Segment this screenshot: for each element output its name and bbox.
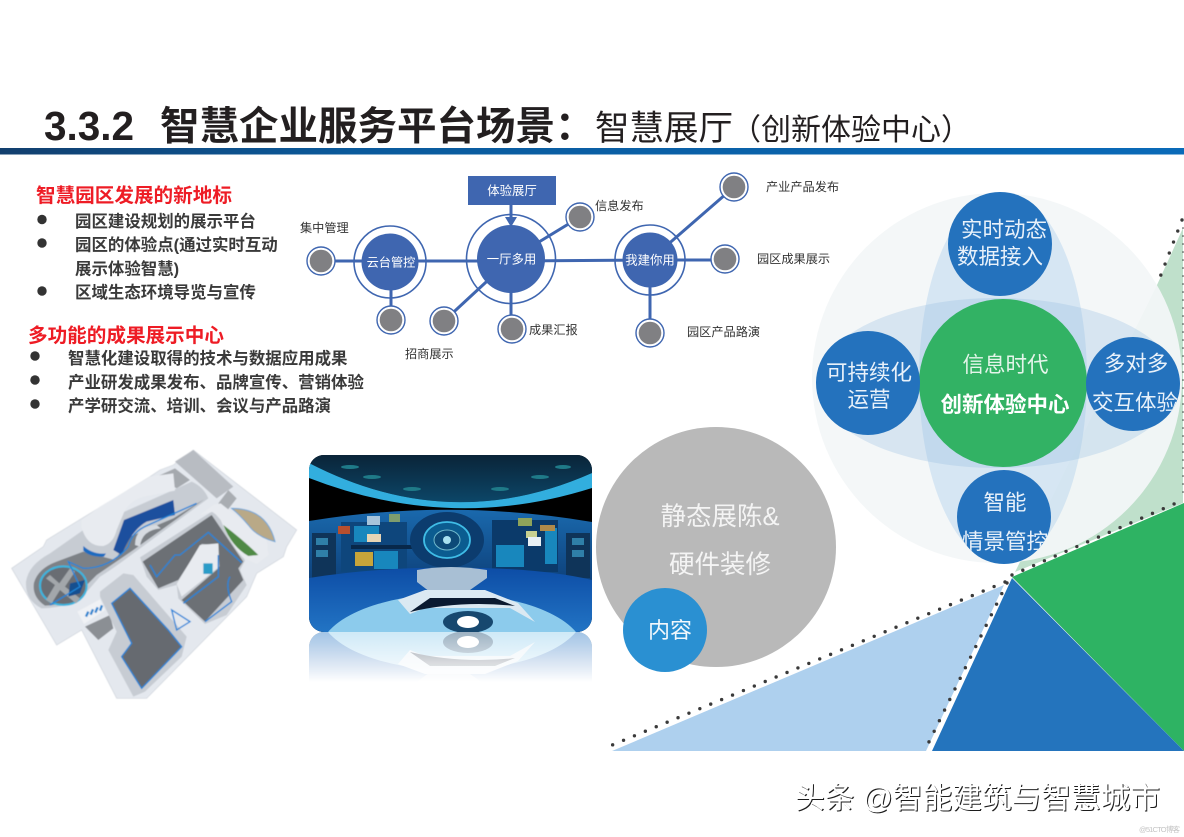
center circle: 创新体验中心 (940, 392, 1070, 417)
hub: one hall multi use: 一厅多用 (487, 252, 536, 266)
text block: results center (28, 324, 364, 416)
center circle: 信息时代 (962, 353, 1049, 377)
room: left circular with corridor (26, 482, 208, 608)
left circle (816, 331, 920, 435)
watermark: 头条 @智能建筑与智慧城市 (796, 783, 1161, 816)
circle diagram: static exhibit and content: 硬件装修 (669, 551, 771, 579)
vertical ellipse (919, 192, 1087, 564)
hub: cloud control: 云台管控 (367, 254, 415, 270)
bottom circle: 智能 (983, 491, 1027, 515)
hub: build together (615, 225, 685, 295)
title: 智慧企业服务平台场景： (160, 105, 594, 149)
bullet list: new landmark: 区域生态环境导览与宣传 (75, 283, 256, 302)
title bar (0, 148, 1184, 154)
central white wall (82, 473, 175, 546)
text block: new landmark (36, 184, 278, 302)
right circle: 多对多 (1104, 352, 1168, 376)
bullet list: results center (30, 349, 364, 416)
box: experience hall (468, 176, 556, 205)
node labels: 招商展示 (405, 346, 454, 361)
right circle: 交互体验 (1092, 391, 1178, 415)
decorative triangles (605, 220, 1184, 751)
guide route (50, 503, 242, 688)
triangle: dark green (1012, 503, 1184, 751)
photo reflection (309, 632, 592, 678)
hub: cloud control (354, 226, 426, 298)
heading: new landmark: 智慧园区发展的新地标 (36, 184, 232, 207)
bullet list: new landmark: 园区的体验点(通过实时互动 (75, 236, 278, 254)
triangle: light green (1015, 228, 1183, 572)
title (44, 103, 971, 149)
triangle: mid blue (932, 578, 1184, 751)
kiosk (203, 563, 213, 574)
node labels: 园区产品路演 (687, 324, 760, 339)
satellite nodes (307, 173, 748, 347)
top circle: 数据接入 (957, 245, 1043, 269)
bottom circle: 情景管控 (962, 530, 1048, 554)
photo: control room (309, 455, 592, 678)
circle diagram: static exhibit and content: 静态展陈& (660, 503, 780, 531)
bottom circle (957, 470, 1051, 564)
heading: results center: 多功能的成果展示中心 (28, 324, 224, 347)
left circle: 可持续化 (826, 361, 912, 385)
title: （创新体验中心） (731, 114, 971, 147)
bullet list: results center: 产学研交流、培训、会议与产品路演 (68, 396, 331, 416)
bullet list: new landmark: 展示体验智慧) (75, 260, 179, 278)
left circle: 运营 (847, 388, 891, 412)
bullet list: results center: 产业研发成果发布、品牌宣传、营销体验 (68, 373, 364, 392)
box: experience hall: 体验展厅 (487, 183, 537, 198)
bullet list: new landmark: 园区建设规划的展示平台 (75, 212, 256, 231)
credit: @51CTO博客 (1139, 824, 1180, 834)
watermark: 头条 @智能建筑与智慧城市 (795, 782, 1160, 815)
triangle: light blue (612, 585, 1004, 751)
outer shell (12, 450, 297, 698)
right circle (1086, 337, 1180, 431)
illustration: exhibition floor plan (12, 450, 297, 698)
booth with blue lights (77, 599, 105, 624)
title: 3.3.2 (44, 103, 134, 149)
blue media wall (83, 500, 175, 557)
content circle (623, 588, 707, 672)
gray circle (596, 427, 836, 667)
title: 智慧展厅 (595, 110, 733, 148)
horizontal ellipse (817, 298, 1177, 468)
hub: one hall multi use (466, 214, 556, 304)
dotted edges (605, 220, 1183, 750)
node labels: 产业产品发布 (766, 179, 839, 194)
hub: build together: 我建你用 (625, 254, 675, 268)
room: right hall (140, 512, 247, 624)
network diagram (300, 173, 839, 361)
pale background circle (812, 193, 1182, 563)
room: lower hall (100, 573, 187, 697)
connector lines (321, 187, 734, 333)
panorama scene (232, 508, 275, 542)
node labels: 信息发布 (595, 198, 644, 213)
circle diagram: static exhibit and content: 内容 (648, 618, 692, 643)
circle diagram: innovation experience center (812, 192, 1182, 564)
bullet list: results center: 智慧化建设取得的技术与数据应用成果 (68, 349, 348, 368)
arrow: box to hub (505, 217, 517, 227)
top circle (948, 192, 1052, 296)
top circle: 实时动态 (961, 218, 1047, 242)
turntable ring (40, 566, 87, 605)
storage rooms (175, 450, 233, 498)
center circle (919, 299, 1087, 467)
bullet list: new landmark (37, 212, 278, 302)
node labels: 成果汇报 (529, 322, 578, 337)
inner white walls (177, 543, 219, 597)
node labels (300, 179, 839, 361)
node labels: 园区成果展示 (757, 252, 830, 266)
circle diagram: static exhibit and content (596, 427, 836, 672)
node labels: 集中管理 (300, 220, 349, 235)
